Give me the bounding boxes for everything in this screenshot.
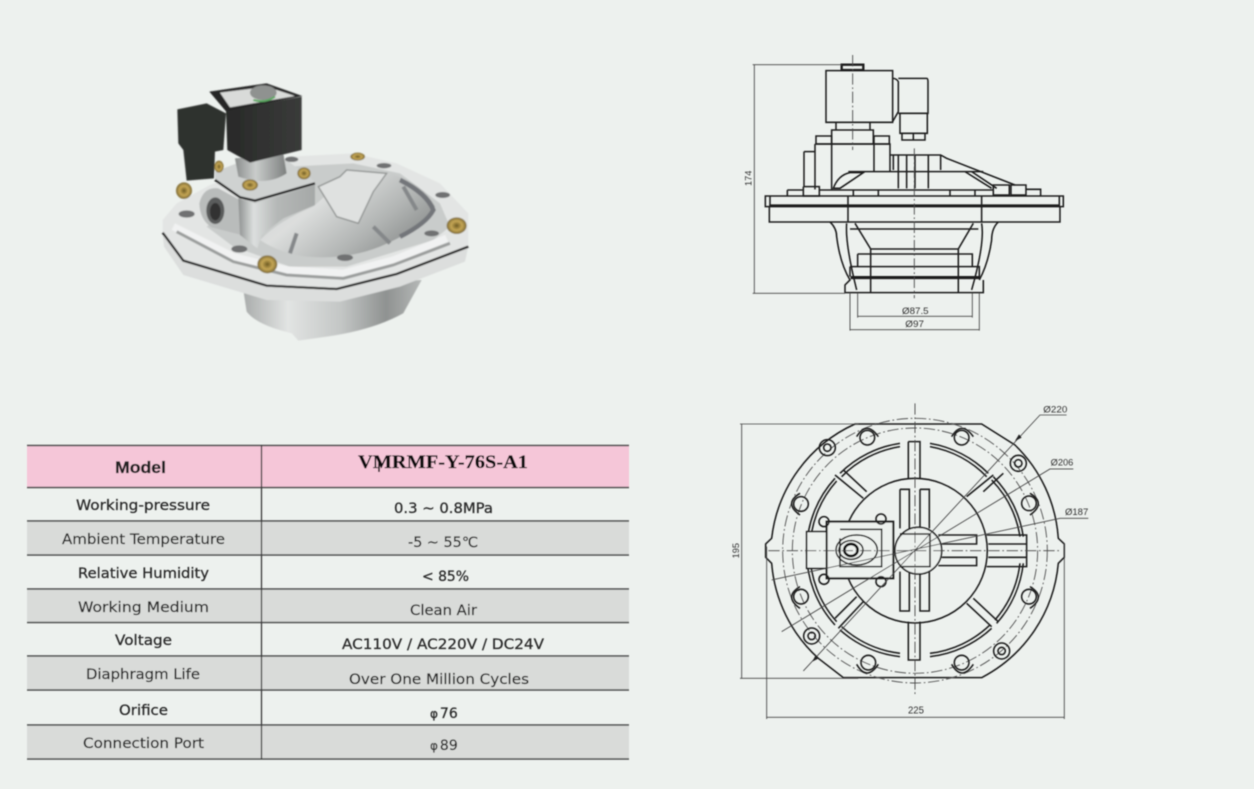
lower bowl outline — [830, 222, 998, 293]
lower flange — [163, 233, 468, 302]
row: model — [115, 453, 528, 477]
flange outline — [766, 424, 1064, 678]
row: ambient temperature — [62, 532, 478, 551]
diameter 187 leader — [772, 507, 1088, 580]
width dimension — [767, 543, 1064, 719]
row: voltage — [115, 633, 544, 653]
diameter 220 leader — [803, 404, 1067, 671]
inlet port — [206, 197, 224, 224]
dome ribs — [290, 187, 417, 253]
rim shadow — [177, 232, 450, 278]
diameter 206 leader — [782, 458, 1073, 632]
valve body outline — [787, 144, 1041, 196]
coil top plate — [220, 87, 295, 107]
row: relative humidity — [78, 566, 469, 585]
coil top — [209, 83, 302, 111]
pitch circle — [792, 428, 1038, 673]
row: voltage: Voltage — [115, 633, 172, 649]
row lines — [27, 446, 629, 759]
row: diaphragm life: Over One Million Cycles — [349, 672, 529, 688]
row: connection port — [83, 736, 458, 754]
dome inner dark edge — [400, 180, 433, 237]
top view technical drawing — [731, 403, 1088, 719]
label 195: 195 — [731, 543, 741, 558]
row: working pressure: Working-pressure — [76, 498, 210, 514]
column line — [260, 445, 262, 759]
row: ambient temperature: Ambient Temperature — [62, 532, 225, 548]
row: connection port: Connection Port — [83, 736, 205, 752]
row: diaphragm life: Diaphragm Life — [86, 667, 200, 683]
valve lower bowl — [243, 280, 422, 341]
green ring — [253, 97, 275, 101]
row: working pressure — [76, 498, 493, 517]
height dimension — [744, 65, 845, 293]
inlet hole — [210, 203, 221, 220]
row: orifice: Orifice — [119, 703, 168, 719]
label: 87.5: Ø87.5 — [902, 306, 929, 316]
row: orifice — [119, 703, 458, 722]
specification table — [27, 445, 629, 759]
row: voltage: AC110V / AC220V / DC24V — [342, 637, 544, 653]
row: ambient temperature: -5 ~ 55℃ — [408, 535, 478, 551]
dome — [260, 173, 435, 257]
label 225: 225 — [908, 706, 924, 717]
valve body — [238, 185, 315, 248]
coil nut — [250, 85, 277, 100]
row: working medium — [78, 600, 477, 619]
upper flange — [163, 153, 468, 288]
centre lines — [768, 403, 1062, 697]
row: orifice: φ76 — [430, 706, 458, 722]
row: working pressure: 0.3 ~ 0.8MPa — [394, 501, 493, 517]
header row — [27, 446, 629, 487]
row: relative humidity: Relative Humidity — [78, 566, 209, 582]
mounting lugs — [792, 428, 1038, 673]
row: diaphragm life — [86, 667, 529, 688]
solenoid coil — [226, 97, 302, 163]
row: relative humidity: < 85% — [422, 569, 469, 585]
solenoid outline — [816, 65, 928, 144]
valve neck — [235, 153, 287, 181]
row: connection port: φ89 — [430, 738, 458, 754]
centre lines — [853, 55, 914, 298]
inner rim second line — [810, 447, 1020, 653]
inlet block — [199, 188, 242, 235]
connector — [177, 103, 226, 181]
label 187: Ø187 — [1065, 507, 1088, 517]
solenoid top — [807, 514, 893, 587]
side view technical drawing — [744, 55, 1063, 331]
raised rib — [318, 170, 387, 223]
mounting holes — [179, 157, 450, 261]
row: working medium: Clean Air — [410, 603, 477, 619]
raised rim band — [173, 227, 447, 273]
bolts — [804, 440, 1026, 659]
valve cap — [215, 160, 315, 199]
height label: 174 — [744, 171, 754, 186]
height dimension — [731, 424, 858, 678]
central hub — [895, 527, 942, 574]
inner rim — [807, 443, 1023, 657]
flange inner shade — [207, 163, 450, 267]
row: working medium: Working Medium — [78, 600, 209, 616]
main flange — [765, 196, 1063, 222]
product photo: pulse valve — [163, 83, 468, 341]
central ring — [843, 478, 987, 623]
shaded rows — [27, 521, 629, 759]
row: model: VMRMF-Y-76S-A1 — [358, 453, 528, 473]
bore dimensions — [850, 293, 979, 331]
label 220: Ø220 — [1043, 404, 1067, 414]
spokes — [835, 442, 1027, 660]
label: 97: Ø97 — [905, 319, 924, 329]
brass bolts — [176, 153, 467, 273]
o-ring — [163, 233, 468, 289]
label 206: Ø206 — [1051, 458, 1073, 468]
bolt circles — [783, 418, 1047, 683]
cap gasket — [215, 180, 315, 201]
row: model: Model — [115, 458, 166, 477]
